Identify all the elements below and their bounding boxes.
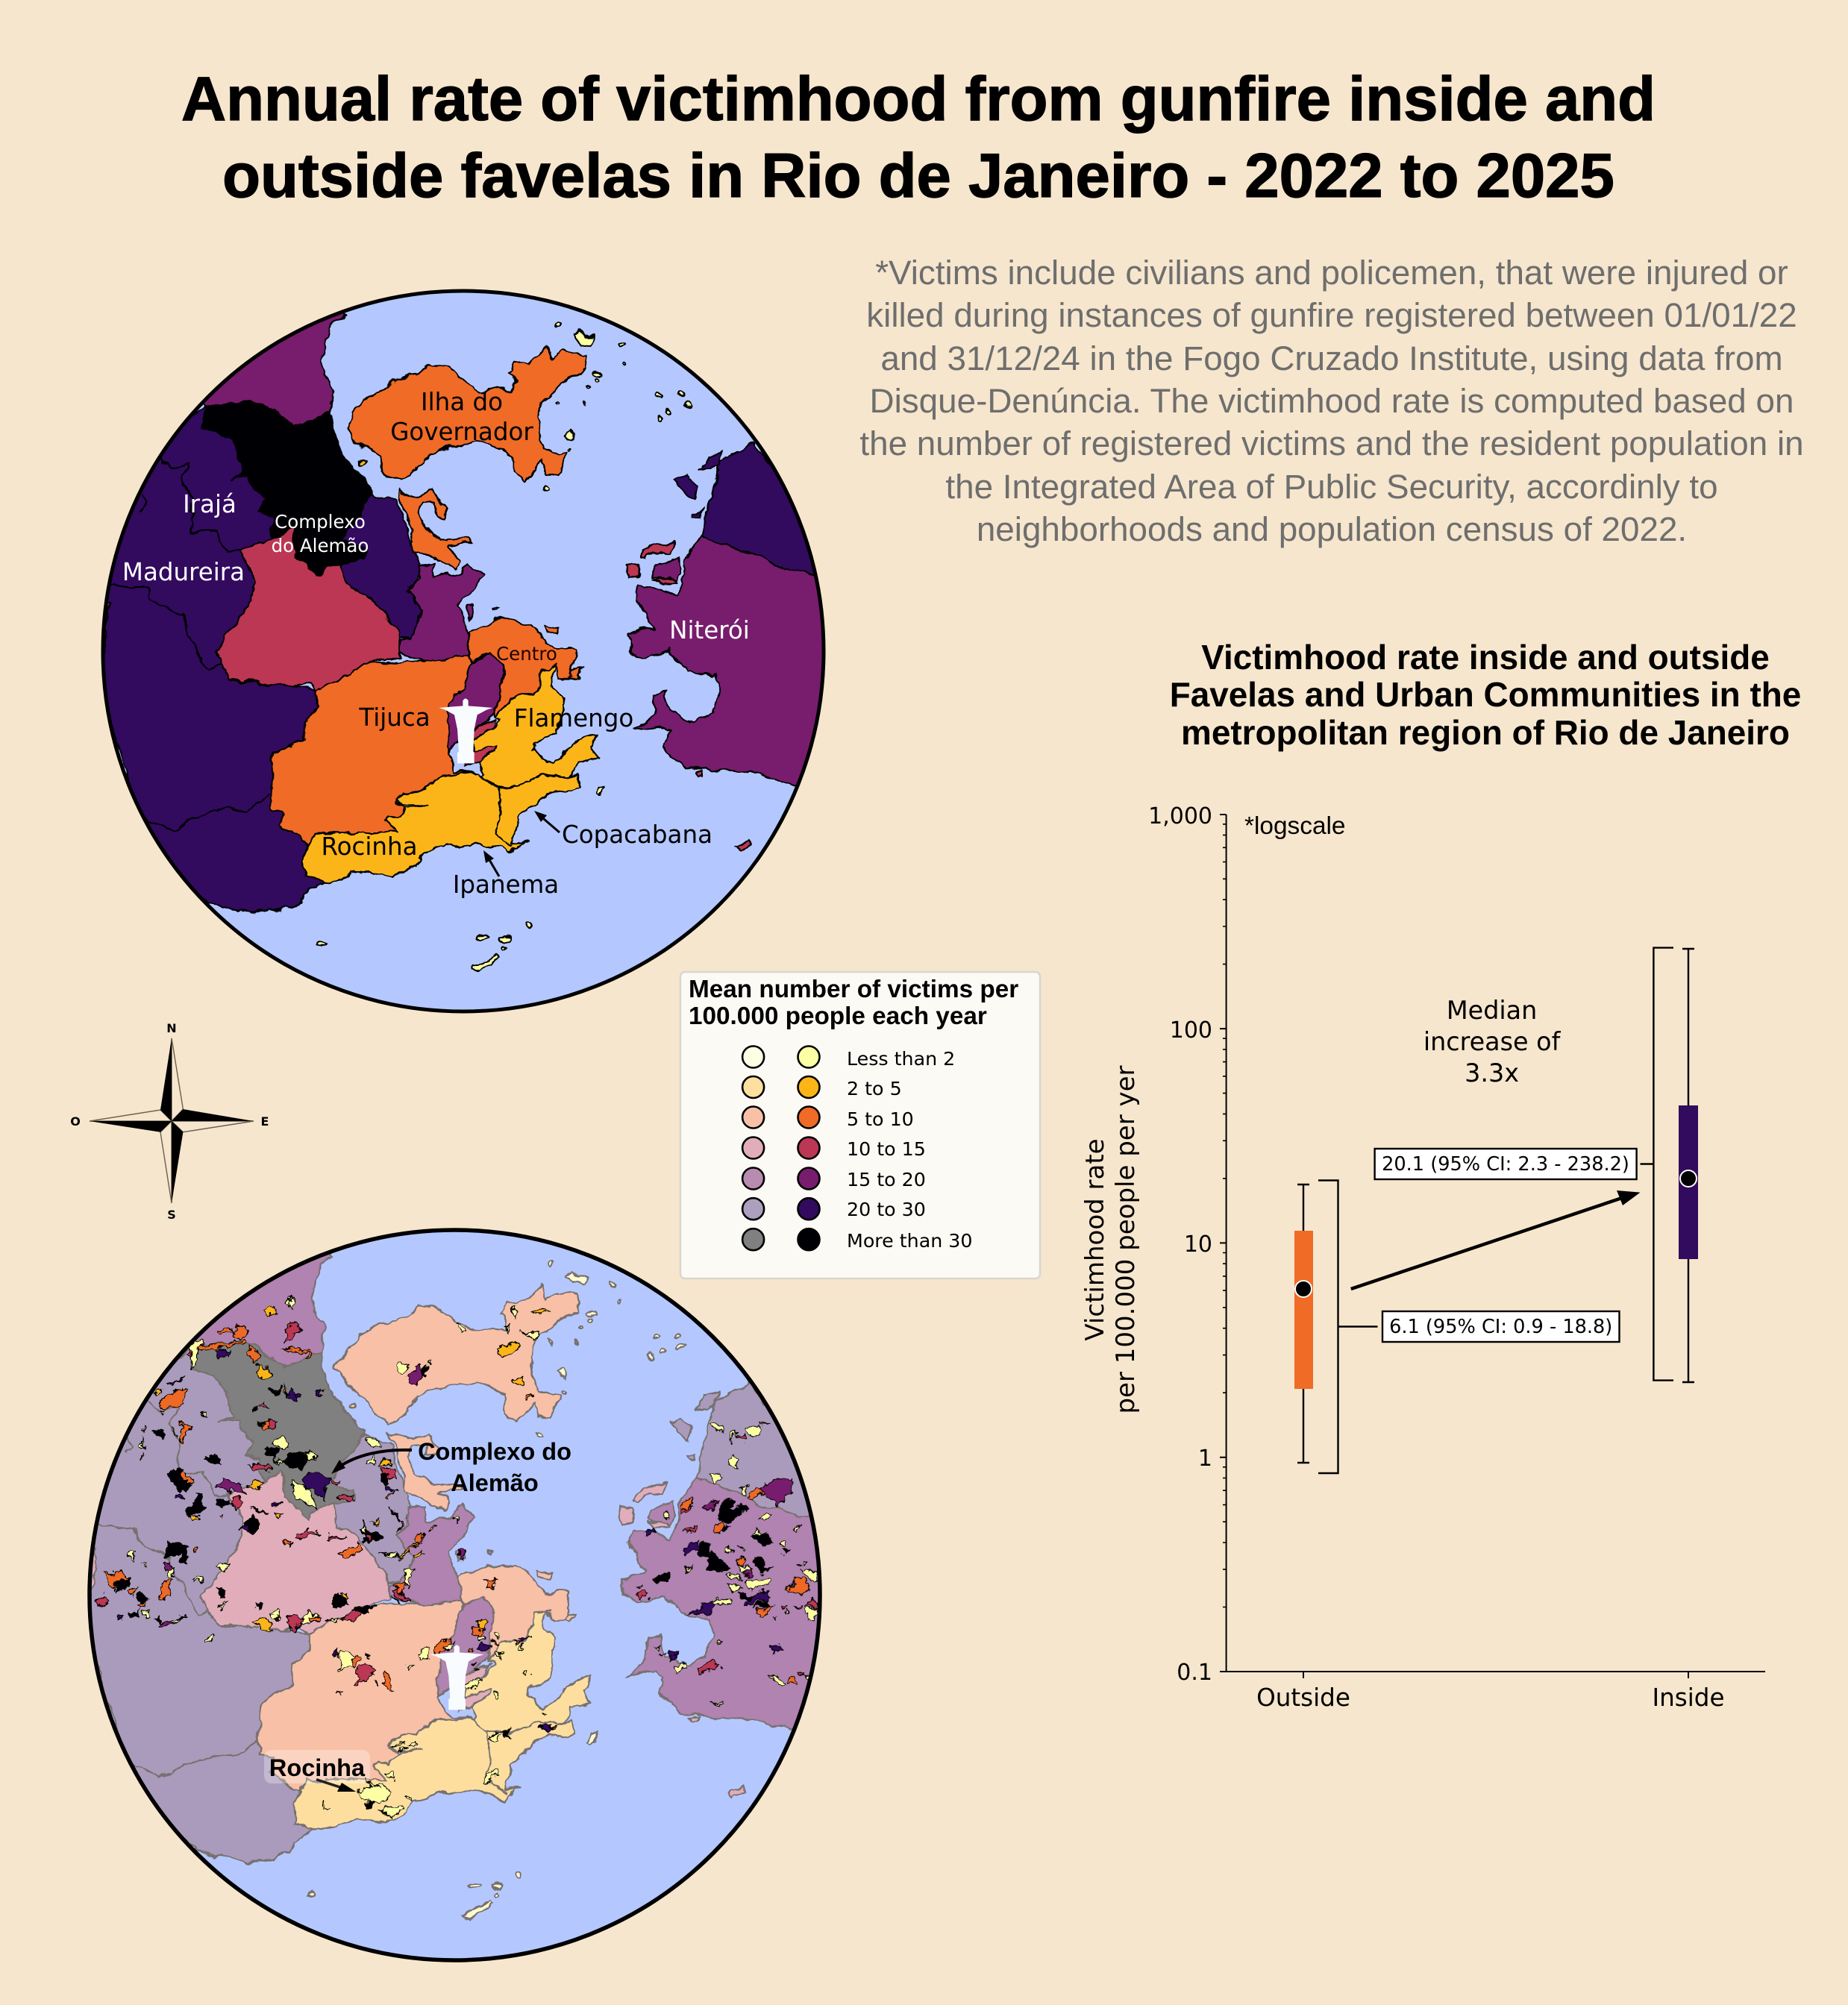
description text block: neighborhoods and population census of 2022. xyxy=(977,510,1687,548)
favela patches west xyxy=(95,1297,465,1642)
title: outside favelas in Rio de Janeiro - 2022 to 2025 xyxy=(222,141,1614,210)
legend labels: 5 to 10 xyxy=(847,1108,914,1130)
callout: outside value: 6.1 (95% CI: 0.9 - 18.8) xyxy=(1389,1316,1612,1338)
map labels: Flamengo xyxy=(514,704,633,732)
annotation: median increase: increase of xyxy=(1423,1027,1562,1056)
description text block: killed during instances of gunfire registered between 01/01/22 xyxy=(866,296,1797,334)
legend swatches xyxy=(742,1046,819,1250)
annotation: median increase: 3.3x xyxy=(1465,1058,1519,1088)
label: Complexo do Alemão: Alemão xyxy=(451,1469,539,1496)
callout: outside value xyxy=(1382,1311,1619,1342)
legend labels: More than 30 xyxy=(847,1230,972,1252)
legend title: Mean number of victims per xyxy=(689,976,1018,1003)
panel: legend xyxy=(680,972,1040,1278)
box: outside xyxy=(1294,1185,1313,1463)
heading: chart title: metropolitan region of Rio de Janeiro xyxy=(1181,713,1790,752)
y tick labels: 10 xyxy=(1184,1231,1212,1258)
map labels xyxy=(122,388,750,899)
description text block: *Victims include civilians and policemen, that were injured or xyxy=(875,254,1788,292)
map labels: Rocinha xyxy=(321,832,418,861)
map labels: do Alemão xyxy=(272,535,369,556)
description text block: Disque-Denúncia. The victimhood rate is computed based on xyxy=(870,382,1794,420)
description text block xyxy=(859,254,1804,548)
heading: chart title: Favelas and Urban Communities in the xyxy=(1170,675,1801,714)
description text block: the Integrated Area of Public Security, accordinly to xyxy=(945,468,1718,506)
label: Complexo do Alemão xyxy=(418,1438,571,1496)
bracket: inside CI xyxy=(1640,948,1673,1381)
icon: Christ the Redeemer statue xyxy=(439,698,493,763)
map water xyxy=(90,1230,820,1960)
panel: top map of victim rate by region xyxy=(90,286,859,1011)
legend labels xyxy=(847,1048,972,1252)
arrow: Ipanema xyxy=(483,850,499,876)
arrow: Complexo do Alemão xyxy=(331,1450,412,1474)
map water xyxy=(103,291,824,1011)
map labels: Ilha do xyxy=(421,388,503,416)
icon: compass rose xyxy=(70,1021,269,1222)
map labels: Tijuca xyxy=(358,703,430,732)
legend labels: 2 to 5 xyxy=(847,1078,902,1099)
map regions faded xyxy=(91,1253,818,1921)
x tick labels: Inside xyxy=(1652,1684,1725,1712)
map border xyxy=(103,291,824,1011)
map labels: Niterói xyxy=(669,616,750,644)
heading: chart title xyxy=(1170,638,1801,752)
panel: bottom map with favela patches xyxy=(76,1224,855,1960)
map labels: Governador xyxy=(390,418,533,446)
arrow: median increase xyxy=(1351,1190,1640,1289)
icon: compass rose: N xyxy=(166,1021,177,1035)
legend labels: 20 to 30 xyxy=(847,1199,926,1220)
legend labels: 15 to 20 xyxy=(847,1169,926,1190)
annotation: median increase xyxy=(1423,996,1562,1088)
legend title xyxy=(689,976,1018,1030)
description text block: and 31/12/24 in the Fogo Cruzado Institute, using data from xyxy=(880,339,1783,377)
map labels: Madureira xyxy=(122,558,245,586)
icon: compass rose: E xyxy=(261,1114,269,1129)
y axis label: per 100.000 people per yer xyxy=(1111,1065,1141,1414)
y axis xyxy=(1220,815,1765,1678)
title: Annual rate of victimhood from gunfire inside and xyxy=(181,64,1656,134)
logscale note: *logscale xyxy=(1244,812,1346,840)
annotation: median increase: Median xyxy=(1447,996,1537,1025)
callout: inside value: 20.1 (95% CI: 2.3 - 238.2) xyxy=(1382,1153,1629,1176)
y tick labels: 100 xyxy=(1170,1017,1212,1044)
description text block: the number of registered victims and the resident population in xyxy=(859,424,1804,462)
legend title: 100.000 people each year xyxy=(689,1002,987,1030)
map labels: Copacabana xyxy=(562,820,712,849)
map labels: Complexo xyxy=(275,511,366,533)
box: inside xyxy=(1679,949,1698,1382)
favela patches xyxy=(95,1297,818,1818)
favela patches south and centre xyxy=(322,1620,558,1818)
bracket: outside CI xyxy=(1318,1180,1377,1473)
x tick labels xyxy=(1256,1684,1725,1712)
map labels: Irajá xyxy=(183,490,237,518)
y tick labels: 1,000 xyxy=(1148,803,1212,829)
favela patches east xyxy=(638,1420,818,1705)
icon: compass rose: O xyxy=(70,1114,81,1129)
chart: boxplot of victimhood rate xyxy=(1080,803,1765,1712)
map labels: Centro xyxy=(496,643,557,665)
y tick labels xyxy=(1148,803,1212,1686)
map border xyxy=(90,1230,820,1960)
legend labels: Less than 2 xyxy=(847,1048,955,1070)
title xyxy=(181,64,1656,210)
heading: chart title: Victimhood rate inside and outside xyxy=(1201,638,1770,677)
y axis label xyxy=(1080,1065,1141,1414)
y axis label: Victimhood rate xyxy=(1080,1138,1110,1341)
legend labels: 10 to 15 xyxy=(847,1138,926,1160)
y tick labels: 0.1 xyxy=(1177,1660,1212,1686)
arrow: Copacabana xyxy=(534,811,560,832)
arrow: Rocinha xyxy=(316,1780,356,1792)
icon: compass rose: S xyxy=(167,1208,176,1222)
favela patches Ilha do Governador xyxy=(485,1308,550,1590)
map regions xyxy=(104,313,822,973)
label: Rocinha: Rocinha xyxy=(269,1754,366,1781)
map labels: Ipanema xyxy=(453,870,559,899)
label: Complexo do Alemão: Complexo do xyxy=(418,1438,571,1465)
x tick labels: Outside xyxy=(1256,1684,1350,1712)
callout: inside value xyxy=(1375,1149,1637,1179)
y tick labels: 1 xyxy=(1198,1446,1212,1472)
icon: Christ the Redeemer statue xyxy=(430,1645,484,1710)
